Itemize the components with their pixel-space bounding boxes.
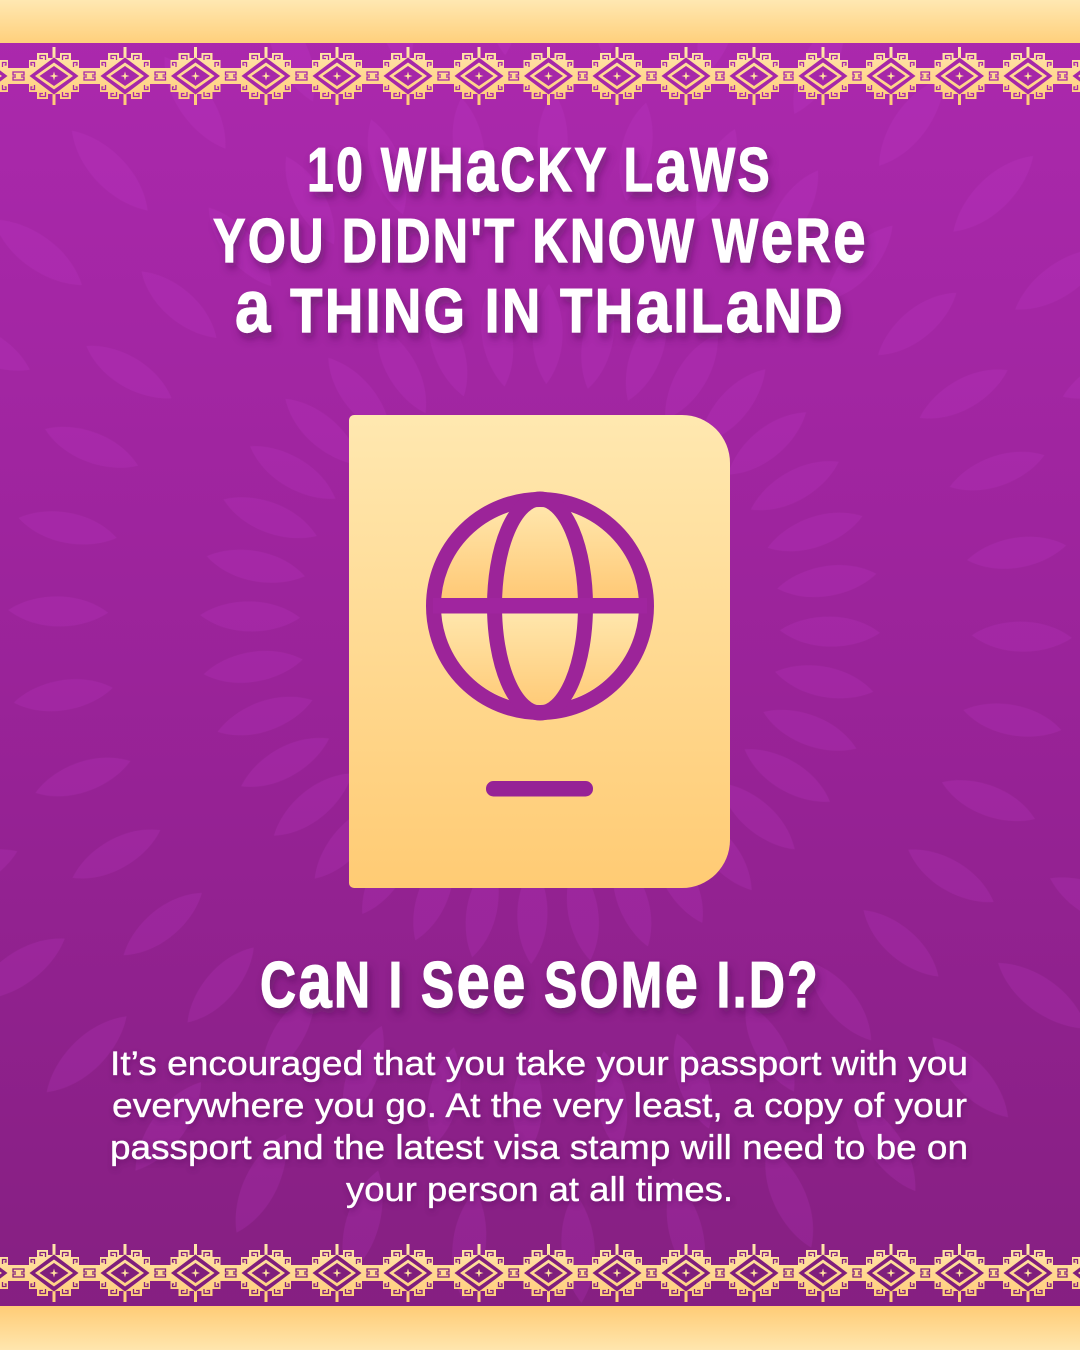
bottom ornamental border xyxy=(0,1244,1080,1302)
body text: everywhere you go. At the very least, a copy of your xyxy=(112,1087,967,1125)
icon: globe xyxy=(433,499,647,713)
body text: your person at all times. xyxy=(346,1171,733,1209)
body text xyxy=(110,1045,968,1209)
passport bar xyxy=(486,781,593,796)
icon: passport xyxy=(349,415,730,888)
body text: It’s encouraged that you take your passport with you xyxy=(110,1045,968,1083)
title xyxy=(213,124,868,348)
bottom gold band xyxy=(0,1306,1080,1350)
title: 10 WHaCKY LaWS xyxy=(307,124,772,207)
title: YOU DIDN'T KNOW WeRe xyxy=(213,195,868,278)
title: a THING IN THaILaND xyxy=(235,265,845,348)
top gold band xyxy=(0,0,1080,43)
passport cover xyxy=(349,415,730,888)
body text: passport and the latest visa stamp will need to be on xyxy=(110,1129,968,1167)
heading: CaN I See SOMe I.D? xyxy=(260,936,820,1024)
top ornamental border xyxy=(0,47,1080,105)
